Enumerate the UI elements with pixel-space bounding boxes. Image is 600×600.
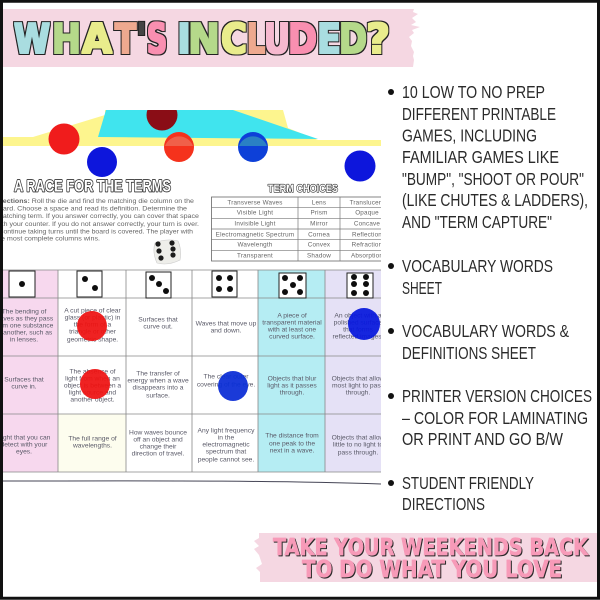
cell: row 1 column 1: The bending of bbox=[2, 308, 46, 316]
counter: red on row 1 bbox=[77, 311, 107, 341]
cell: row 3 column 3: direction of travel. bbox=[132, 450, 185, 458]
cell: row 1 column 6: An object with a bbox=[334, 312, 382, 320]
bullet: printable games: 10 LOW TO NO PREP bbox=[402, 82, 545, 102]
text: directions: board. Choose a space and read its definition. Determine the bbox=[0, 206, 187, 212]
cell: row 2 column 3: surface. bbox=[146, 392, 170, 400]
cell: row 3 column 2 bbox=[68, 436, 117, 450]
table: term choices: Wavelength bbox=[237, 242, 273, 248]
bullet: vocabulary and definitions sheet: DEFINITIONS SHEET bbox=[402, 343, 536, 363]
table: term choices: Transverse Waves bbox=[227, 200, 283, 206]
photo: game board bbox=[0, 100, 392, 484]
die face: two bbox=[77, 271, 102, 297]
title: what's included?: D bbox=[288, 15, 317, 63]
counter: red top left bbox=[48, 124, 80, 154]
table: term choices: Translucent bbox=[350, 200, 384, 206]
cell: row 3 column 4: in the bbox=[218, 434, 234, 442]
title: what's included? bbox=[14, 15, 390, 63]
cell: row 2 column 1 bbox=[4, 377, 44, 388]
counter: blue on row 1 bbox=[348, 308, 380, 340]
counter: blue top left bbox=[87, 147, 117, 177]
counter: blue right bbox=[344, 150, 376, 182]
banner: pink tape bbox=[254, 533, 597, 582]
cell: row 2 column 4: covering of the eye. bbox=[197, 382, 255, 388]
table: term choices: Mirror bbox=[310, 220, 328, 228]
counter: blue centre bbox=[238, 132, 268, 162]
tagline: TO DO WHAT YOU LOVE bbox=[302, 557, 562, 583]
die face: six bbox=[347, 273, 373, 298]
cell: row 2 column 2: light source and bbox=[69, 390, 116, 396]
cell: row 1 column 1 bbox=[3, 309, 54, 342]
title: what's included?: H bbox=[52, 15, 81, 63]
bullet: printable games: FAMILIAR GAMES LIKE bbox=[402, 147, 559, 167]
bullet list bbox=[388, 82, 592, 514]
die face: one bbox=[9, 271, 35, 297]
bullet: printable games bbox=[388, 82, 588, 232]
counter: red centre bbox=[164, 132, 194, 162]
cell: row 2 column 6 bbox=[332, 376, 381, 396]
cell: row 1 column 2: triangle or other bbox=[69, 328, 117, 336]
cell: row 1 column 6: that forms bbox=[343, 326, 374, 334]
cell: row 1 column 2 bbox=[64, 308, 122, 344]
table: term choices: Invisible Light bbox=[234, 220, 276, 228]
table: term choices: Concave bbox=[354, 220, 380, 228]
counter: red on row 2 bbox=[80, 369, 110, 399]
cell: row 2 column 6: Objects that allow bbox=[332, 376, 385, 382]
cell: row 3 column 2: wavelengths. bbox=[72, 442, 112, 450]
table: term choices: Cornea bbox=[308, 232, 330, 238]
table: term choices: Electromagnetic Spectrum bbox=[216, 232, 294, 238]
table: term choices: Refraction bbox=[352, 242, 383, 248]
title: what's included?: N bbox=[188, 15, 220, 63]
cell: row 1 column 6: polished surface bbox=[334, 320, 383, 326]
tagline bbox=[273, 535, 589, 583]
cell: row 3 column 5 bbox=[265, 433, 318, 452]
footer banner bbox=[254, 533, 597, 583]
bullet: student friendly directions: DIRECTIONS bbox=[402, 494, 485, 514]
cell: row 3 column 4: electromagnetic bbox=[202, 442, 250, 448]
cell: row 2 column 3: energy when a wave bbox=[127, 378, 189, 384]
cell: row 3 column 4: people cannot see. bbox=[198, 456, 254, 464]
cell: row 2 column 5: light as it passes bbox=[267, 382, 317, 390]
title: what's included?: E bbox=[317, 15, 341, 63]
table: term choices: Shadow bbox=[307, 252, 331, 260]
cell: row 3 column 1 bbox=[3, 435, 50, 455]
cell: row 3 column 6: Objects that allow bbox=[332, 434, 385, 442]
table: term choices: Convex bbox=[308, 242, 331, 248]
title: what's included?: S bbox=[147, 15, 167, 63]
game grid bbox=[3, 270, 385, 484]
cell: row 1 column 1: in lenses. bbox=[10, 336, 38, 344]
bullet: vocabulary words sheet: SHEET bbox=[402, 278, 442, 298]
cell: row 3 column 5: one peak to the bbox=[269, 440, 315, 448]
cell: row 2 column 2: The absence of bbox=[69, 368, 116, 376]
cell: row 2 column 5: through. bbox=[280, 390, 304, 396]
cell: row 2 column 5 bbox=[267, 376, 317, 396]
bullet: vocabulary and definitions sheet bbox=[388, 321, 569, 363]
cell: row 2 column 2: light from when an bbox=[65, 376, 120, 382]
bullet: vocabulary words sheet: VOCABULARY WORDS bbox=[402, 256, 553, 276]
title: what's included?: D bbox=[339, 15, 367, 63]
title: what's included?: U bbox=[264, 15, 290, 63]
table: term choices: Absorption bbox=[351, 252, 383, 260]
table: term choices: Lens bbox=[312, 200, 326, 206]
cell: row 2 column 3: disappears into a bbox=[133, 384, 184, 392]
title: what's included?: T bbox=[115, 15, 136, 63]
title: what's included?: I bbox=[177, 15, 191, 63]
cell: row 2 column 2: another object. bbox=[70, 396, 115, 404]
bullet: printable games: GAMES, INCLUDING bbox=[402, 126, 537, 146]
bullet: student friendly directions: STUDENT FRIENDLY bbox=[402, 473, 534, 493]
cell: row 2 column 2: object is between a bbox=[64, 382, 121, 390]
cell: row 1 column 5 bbox=[262, 312, 322, 340]
cell: row 3 column 5: next in a wave. bbox=[270, 448, 314, 454]
cell: row 3 column 3: change their bbox=[140, 444, 177, 450]
text: directions bbox=[0, 198, 199, 242]
bullet: printer version choices bbox=[388, 386, 592, 449]
cell: row 3 column 6: little to no light to bbox=[333, 442, 383, 448]
cell: row 1 column 5: A piece of bbox=[277, 312, 307, 320]
title: what's included?: ' bbox=[137, 15, 146, 63]
table: term choices: Visible Light bbox=[237, 210, 273, 216]
cell: row 1 column 5: with at least one bbox=[267, 326, 316, 334]
title: what's included?: L bbox=[247, 15, 265, 63]
cell: row 3 column 3: off an object and bbox=[133, 436, 183, 444]
cell: row 2 column 3: The transfer of bbox=[136, 370, 180, 378]
cell: row 1 column 5: curved surface. bbox=[269, 334, 315, 340]
cell: row 3 column 5: The distance from bbox=[265, 432, 319, 440]
counter: dark red bbox=[146, 110, 178, 130]
cell: row 2 column 3 bbox=[127, 370, 189, 400]
banner: pink tape bbox=[3, 9, 420, 67]
cell: row 3 column 3 bbox=[130, 430, 187, 456]
cell: row 2 column 6: through. bbox=[346, 390, 370, 396]
cell: row 3 column 4: spectrum that bbox=[206, 448, 246, 456]
heading: term choices: TERM CHOICES bbox=[268, 183, 338, 195]
table: term choices: Transparent bbox=[237, 252, 273, 260]
heading: a race for the terms: A RACE FOR THE TERMS bbox=[14, 178, 171, 196]
title: what's included?: ? bbox=[366, 15, 390, 63]
die face: three bbox=[146, 272, 171, 298]
cell: row 1 column 4 bbox=[196, 321, 256, 332]
bullet: printable games: AND "TERM CAPTURE" bbox=[402, 212, 552, 232]
cell: row 1 column 2: A cut piece of clear bbox=[64, 308, 122, 314]
cell: row 2 column 2 bbox=[64, 368, 121, 404]
cell: row 3 column 2: The full range of bbox=[68, 436, 117, 442]
cell: row 1 column 3: Surfaces that bbox=[138, 316, 178, 324]
cell: row 1 column 2: geometric shape. bbox=[67, 336, 118, 344]
cell: row 1 column 2: glass (or plastic) in bbox=[65, 314, 121, 322]
cell: row 2 column 5: Objects that blur bbox=[268, 376, 317, 382]
cell: row 1 column 5: transparent material bbox=[262, 320, 322, 326]
cell: row 3 column 3: How waves bounce bbox=[129, 430, 187, 436]
title: what's included?: W bbox=[14, 15, 50, 63]
cell: row 2 column 1: Surfaces that bbox=[4, 376, 44, 384]
title banner bbox=[3, 9, 420, 67]
cell: row 3 column 1: detect with your bbox=[1, 442, 48, 448]
bullet: printer version choices: OR PRINT AND GO B/W bbox=[402, 429, 563, 449]
table: term choices: Reflection bbox=[352, 232, 382, 238]
cell: row 1 column 3: curve out. bbox=[143, 324, 173, 330]
counter: blue on row 2 bbox=[218, 371, 248, 401]
die face: five bbox=[279, 273, 306, 298]
bullet: vocabulary words sheet bbox=[388, 256, 553, 298]
bullet: student friendly directions bbox=[388, 473, 534, 514]
illustration: car shape on board bbox=[3, 110, 381, 146]
cell: row 2 column 4 bbox=[197, 374, 255, 388]
cell: row 3 column 4 bbox=[198, 428, 255, 464]
cell: row 2 column 1: curve in. bbox=[11, 384, 37, 390]
cell: row 1 column 3 bbox=[138, 317, 178, 328]
table: term choices: Prism bbox=[310, 210, 328, 216]
cell: row 1 column 2: the form of a bbox=[74, 322, 112, 328]
cell: row 3 column 4: Any light frequency bbox=[198, 428, 255, 434]
text: directions: with your counter. If you do not answer correctly, your turn is over. bbox=[0, 221, 199, 228]
text: directions: continue taking turns until the board is covered. The player with bbox=[0, 228, 193, 236]
cell: row 3 column 1: eyes. bbox=[16, 448, 32, 456]
cell: row 1 column 4: and down. bbox=[211, 328, 242, 334]
table: term choices: Opaque bbox=[355, 210, 379, 216]
cell: row 1 column 6: reflected images. bbox=[333, 334, 384, 340]
title: what's included?: C bbox=[221, 15, 247, 63]
bullet: printable games: DIFFERENT PRINTABLE bbox=[402, 104, 556, 124]
cell: row 2 column 4: The clear outer bbox=[204, 374, 249, 380]
text: directions: matching term. If you answer correctly, you can cover that space bbox=[0, 213, 199, 220]
cell: row 1 column 4: Waves that move up bbox=[196, 320, 257, 328]
cell: row 1 column 6 bbox=[333, 312, 384, 340]
cell: row 2 column 6: most light to pass bbox=[332, 382, 385, 390]
cell: row 3 column 6: pass through. bbox=[338, 450, 378, 456]
icon: real die bbox=[154, 240, 181, 264]
cell: row 3 column 6 bbox=[332, 435, 381, 456]
title: what's included?: A bbox=[82, 15, 112, 63]
table: term choices bbox=[211, 197, 392, 261]
die face: four bbox=[212, 271, 237, 297]
